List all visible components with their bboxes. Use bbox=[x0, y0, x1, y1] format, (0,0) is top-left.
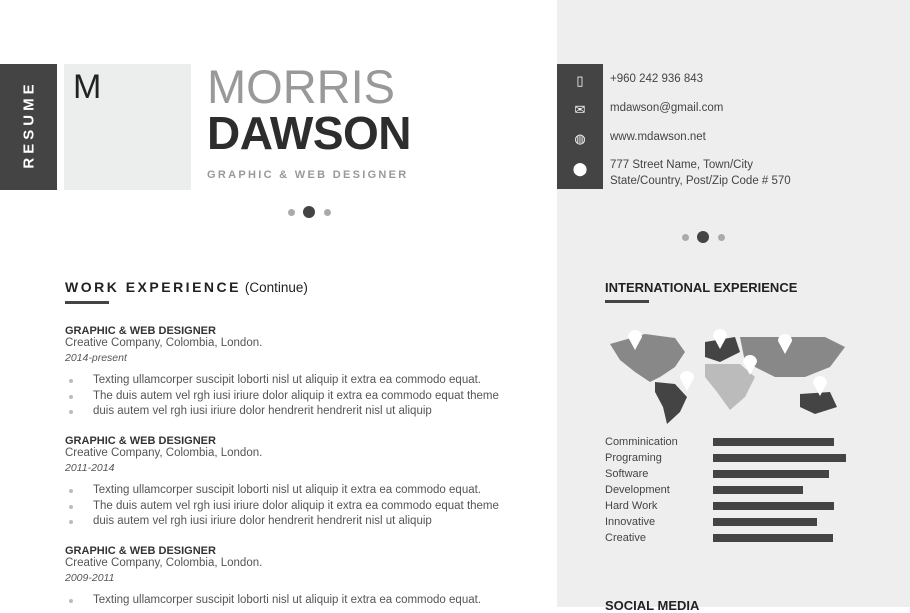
job 3: 2009-2011 bbox=[65, 572, 114, 584]
contact icons column: ⬤ bbox=[573, 161, 587, 176]
skills chart: Creative bbox=[605, 532, 646, 544]
job 2: 2011-2014 bbox=[65, 462, 114, 474]
job 1: 2014-present bbox=[65, 352, 127, 364]
contact info: +960 242 936 843 bbox=[610, 73, 703, 85]
skills chart: Development bbox=[605, 484, 670, 496]
job 2: The duis autem vel rgh iusi iriure dolor aliquip it extra ea commodo equat theme bbox=[93, 500, 499, 512]
dots left bbox=[288, 206, 331, 218]
subtitle: GRAPHIC & WEB DESIGNER bbox=[207, 169, 409, 181]
job 1: Texting ullamcorper suscipit loborti nisl ut aliquip it extra ea commodo equat. bbox=[93, 374, 481, 386]
monogram box bbox=[64, 64, 191, 190]
skills chart: Hard Work bbox=[605, 500, 657, 512]
job 2 bbox=[65, 435, 499, 527]
text: State/Country, Post/Zip Code # 570 bbox=[610, 175, 791, 187]
monogram box: M bbox=[73, 68, 101, 106]
resume side tab: RESUME bbox=[20, 80, 38, 169]
international experience heading: INTERNATIONAL EXPERIENCE bbox=[605, 280, 797, 295]
job 2: GRAPHIC & WEB DESIGNER bbox=[65, 435, 216, 447]
text: mdawson@gmail.com bbox=[610, 102, 723, 114]
work experience heading bbox=[65, 279, 308, 304]
resume side tab bbox=[0, 64, 57, 190]
job 3 bbox=[65, 545, 481, 606]
skills chart: Programing bbox=[605, 452, 662, 464]
right panel background bbox=[557, 0, 910, 607]
name: MORRIS bbox=[207, 60, 395, 113]
contact icons column bbox=[557, 64, 603, 189]
skills chart: Comminication bbox=[605, 436, 678, 448]
contact icons column: ◍ bbox=[574, 131, 586, 146]
name bbox=[207, 60, 411, 159]
skills chart: Innovative bbox=[605, 516, 655, 528]
job 3: Creative Company, Colombia, London. bbox=[65, 557, 262, 569]
skills chart: Software bbox=[605, 468, 648, 480]
text: www.mdawson.net bbox=[610, 131, 706, 143]
job 1: The duis autem vel rgh iusi iriure dolor aliquip it extra ea commodo equat theme bbox=[93, 390, 499, 402]
text: 777 Street Name, Town/City bbox=[610, 159, 753, 171]
job 2: Creative Company, Colombia, London. bbox=[65, 447, 262, 459]
contact icons column: ▯ bbox=[576, 73, 584, 88]
world map bbox=[610, 329, 845, 424]
social media heading: SOCIAL MEDIA bbox=[605, 598, 699, 613]
job 3: GRAPHIC & WEB DESIGNER bbox=[65, 545, 216, 557]
job 3: Texting ullamcorper suscipit loborti nisl ut aliquip it extra ea commodo equat. bbox=[93, 594, 481, 606]
job 1: Creative Company, Colombia, London. bbox=[65, 337, 262, 349]
job 1 bbox=[65, 325, 499, 417]
international experience heading bbox=[605, 280, 797, 303]
job 1: GRAPHIC & WEB DESIGNER bbox=[65, 325, 216, 337]
job 2: duis autem vel rgh iusi iriure dolor hendrerit hendrerit nisl ut aliquip bbox=[93, 515, 432, 527]
dots right bbox=[682, 231, 725, 243]
name: DAWSON bbox=[207, 107, 411, 159]
work experience heading: WORK EXPERIENCE (Continue) bbox=[65, 279, 308, 295]
skills chart bbox=[605, 436, 846, 544]
contact icons column: ✉ bbox=[575, 102, 585, 117]
job 2: Texting ullamcorper suscipit loborti nisl ut aliquip it extra ea commodo equat. bbox=[93, 484, 481, 496]
job 1: duis autem vel rgh iusi iriure dolor hendrerit hendrerit nisl ut aliquip bbox=[93, 405, 432, 417]
